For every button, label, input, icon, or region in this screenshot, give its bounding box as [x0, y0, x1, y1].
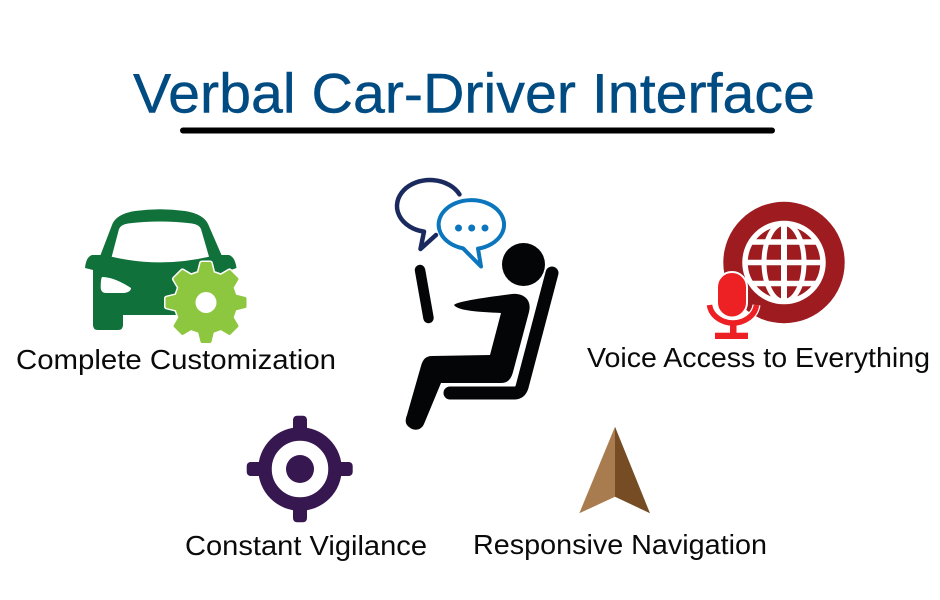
icon: target [247, 416, 353, 522]
globe disc [723, 202, 845, 323]
torso and leg [406, 294, 530, 430]
icon: navigation arrow [579, 427, 650, 513]
icon: driver in seat with speech bubbles [397, 180, 552, 430]
label: responsive navigation: Responsive Navigation [473, 529, 767, 560]
label: constant vigilance: Constant Vigilance [185, 530, 427, 561]
gear [167, 264, 245, 342]
label: complete customization: Complete Customization [16, 344, 336, 375]
blue speech bubble [439, 200, 504, 266]
globe grid [745, 223, 823, 302]
navy speech bubble [397, 180, 460, 249]
title: Verbal Car-Driver Interface [133, 62, 815, 124]
seat [450, 273, 552, 393]
icon: globe with microphone [710, 202, 845, 339]
microphone [710, 272, 756, 339]
forearm and device [420, 270, 428, 318]
title underline [180, 128, 775, 134]
car body [85, 209, 236, 330]
head [502, 243, 545, 286]
icon: car with gear [85, 209, 245, 342]
label: voice access to everything: Voice Access to Everything [587, 342, 930, 373]
